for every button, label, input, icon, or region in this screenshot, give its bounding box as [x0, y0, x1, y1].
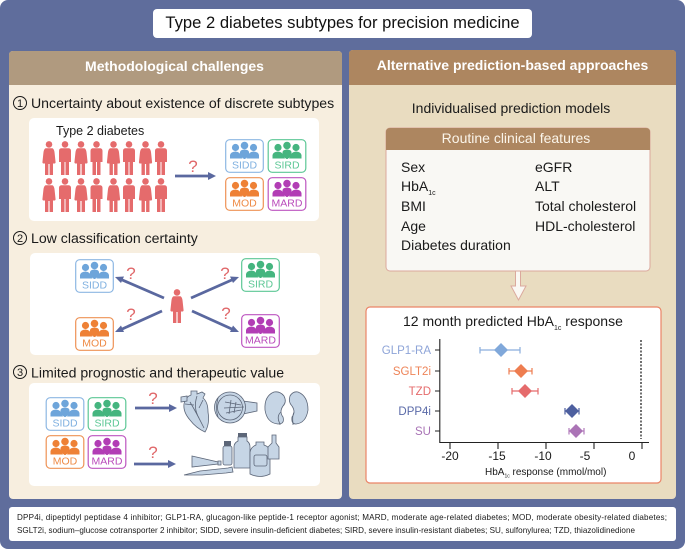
- row: DPP4i: DPP4i: [398, 406, 431, 418]
- row: GLP1-RA: [382, 343, 520, 357]
- x axis label: 1c: [504, 474, 510, 480]
- panel: alternative prediction-based approaches: [349, 50, 676, 499]
- icon: eye: [214, 392, 257, 423]
- arrows to subtypes: [115, 276, 239, 332]
- x axis label: HbA: [485, 467, 504, 478]
- routine clinical features box: [386, 128, 650, 271]
- question marks: [126, 264, 231, 324]
- features left column: Age: [401, 218, 426, 234]
- x axis tick labels: -5: [580, 449, 591, 463]
- question marks: ?: [221, 304, 231, 323]
- features left column: 1c: [428, 190, 436, 197]
- features right column: ALT: [535, 178, 560, 194]
- heading: uncertainty about subtypes: Uncertainty about existence of discrete subtypes: [31, 95, 334, 111]
- features right column: eGFR: [535, 159, 572, 175]
- subtype badges: [46, 398, 126, 468]
- features left column: Diabetes duration: [401, 237, 511, 253]
- features header: Routine clinical features: [442, 130, 590, 146]
- x axis tick labels: -15: [488, 449, 506, 463]
- features left column: [401, 159, 511, 253]
- footnote abbreviations: DPP4i, dipeptidyl peptidase 4 inhibitor; GLP1-RA, glucagon-like peptide-1 receptor agonist; MARD, moderate age-related diabetes; MOD, moderate obesity-related diabetes;: [17, 513, 667, 522]
- subtype badges: [76, 259, 279, 350]
- row: SGLT2i: [393, 364, 532, 378]
- heading: limited prognostic and therapeutic value: Limited prognostic and therapeutic value: [31, 364, 284, 380]
- features left column: BMI: [401, 198, 426, 214]
- question marks: ?: [220, 264, 230, 283]
- features right column: Total cholesterol: [535, 198, 636, 214]
- features right column: HDL-cholesterol: [535, 218, 635, 234]
- chart title: 12 month predicted HbA: [403, 313, 554, 329]
- footnote abbreviations: [9, 507, 676, 541]
- heading: alternative approaches: Alternative prediction-based approaches: [377, 57, 648, 73]
- features right column: [535, 159, 636, 234]
- arrow: features to response: [511, 271, 526, 300]
- arrow to medications: [134, 443, 176, 468]
- title: Type 2 diabetes subtypes for precision medicine: [165, 13, 520, 32]
- section 1 diagram: [29, 118, 319, 221]
- row: SU: [415, 424, 584, 438]
- heading: methodological challenges: [9, 51, 342, 85]
- x axis tick labels: -10: [534, 449, 552, 463]
- footnote abbreviations: SGLT2i, sodium–glucose cotransporter 2 inhibitor; SIDD, severe insulin-deficient diabetes; SIRD, severe insulin-resistant diabetes; SU, sulfonylurea; TZD, thiazolidinedione: [17, 526, 635, 535]
- x axis tick labels: 0: [629, 449, 636, 463]
- section 2 diagram: [30, 253, 320, 355]
- icon: person: [170, 289, 184, 323]
- chart title: response: [561, 313, 623, 329]
- subheading: individualised prediction models: Individualised prediction models: [412, 100, 610, 116]
- heading: uncertainty about subtypes: 1: [17, 98, 23, 110]
- chart title: 1c: [554, 325, 562, 332]
- arrow with question mark: ?: [188, 157, 198, 176]
- row: TZD: TZD: [409, 386, 431, 398]
- label: type 2 diabetes: Type 2 diabetes: [56, 124, 144, 138]
- heading: methodological challenges: Methodological challenges: [85, 58, 264, 74]
- row: TZD: [409, 384, 538, 398]
- features header: [386, 128, 650, 150]
- arrow to organs: ?: [148, 389, 158, 408]
- x axis label: response (mmol/mol): [510, 467, 606, 478]
- arrow to organs: [135, 389, 177, 412]
- heading: low classification certainty: Low classification certainty: [31, 230, 199, 246]
- axes: [435, 339, 649, 449]
- forest plot panel: [366, 307, 661, 483]
- row: DPP4i: [398, 404, 579, 418]
- panel: methodological challenges: [9, 51, 342, 499]
- section 3 diagram: [29, 383, 320, 486]
- heading: alternative approaches: [349, 50, 676, 85]
- heading: limited prognostic and therapeutic value: 3: [17, 367, 23, 379]
- question marks: ?: [126, 264, 136, 283]
- row: SU: SU: [415, 426, 431, 438]
- row: GLP1-RA: GLP1-RA: [382, 345, 431, 357]
- x axis tick labels: -20: [441, 449, 459, 463]
- features left column: Sex: [401, 159, 425, 175]
- features left column: HbA: [401, 178, 428, 194]
- arrow to medications: ?: [148, 443, 158, 462]
- icon: medication bottles and syringes: [184, 433, 279, 476]
- question marks: ?: [126, 305, 136, 324]
- heading: low classification certainty: 2: [17, 233, 23, 245]
- icon: population of people: [42, 141, 167, 212]
- x axis tick labels: [441, 449, 636, 463]
- title: [153, 9, 532, 38]
- subtype badges: [226, 140, 306, 210]
- icon: kidneys: [265, 392, 308, 425]
- icon: heart: [181, 391, 209, 432]
- row: SGLT2i: SGLT2i: [393, 366, 431, 378]
- arrow with question mark: [175, 157, 216, 180]
